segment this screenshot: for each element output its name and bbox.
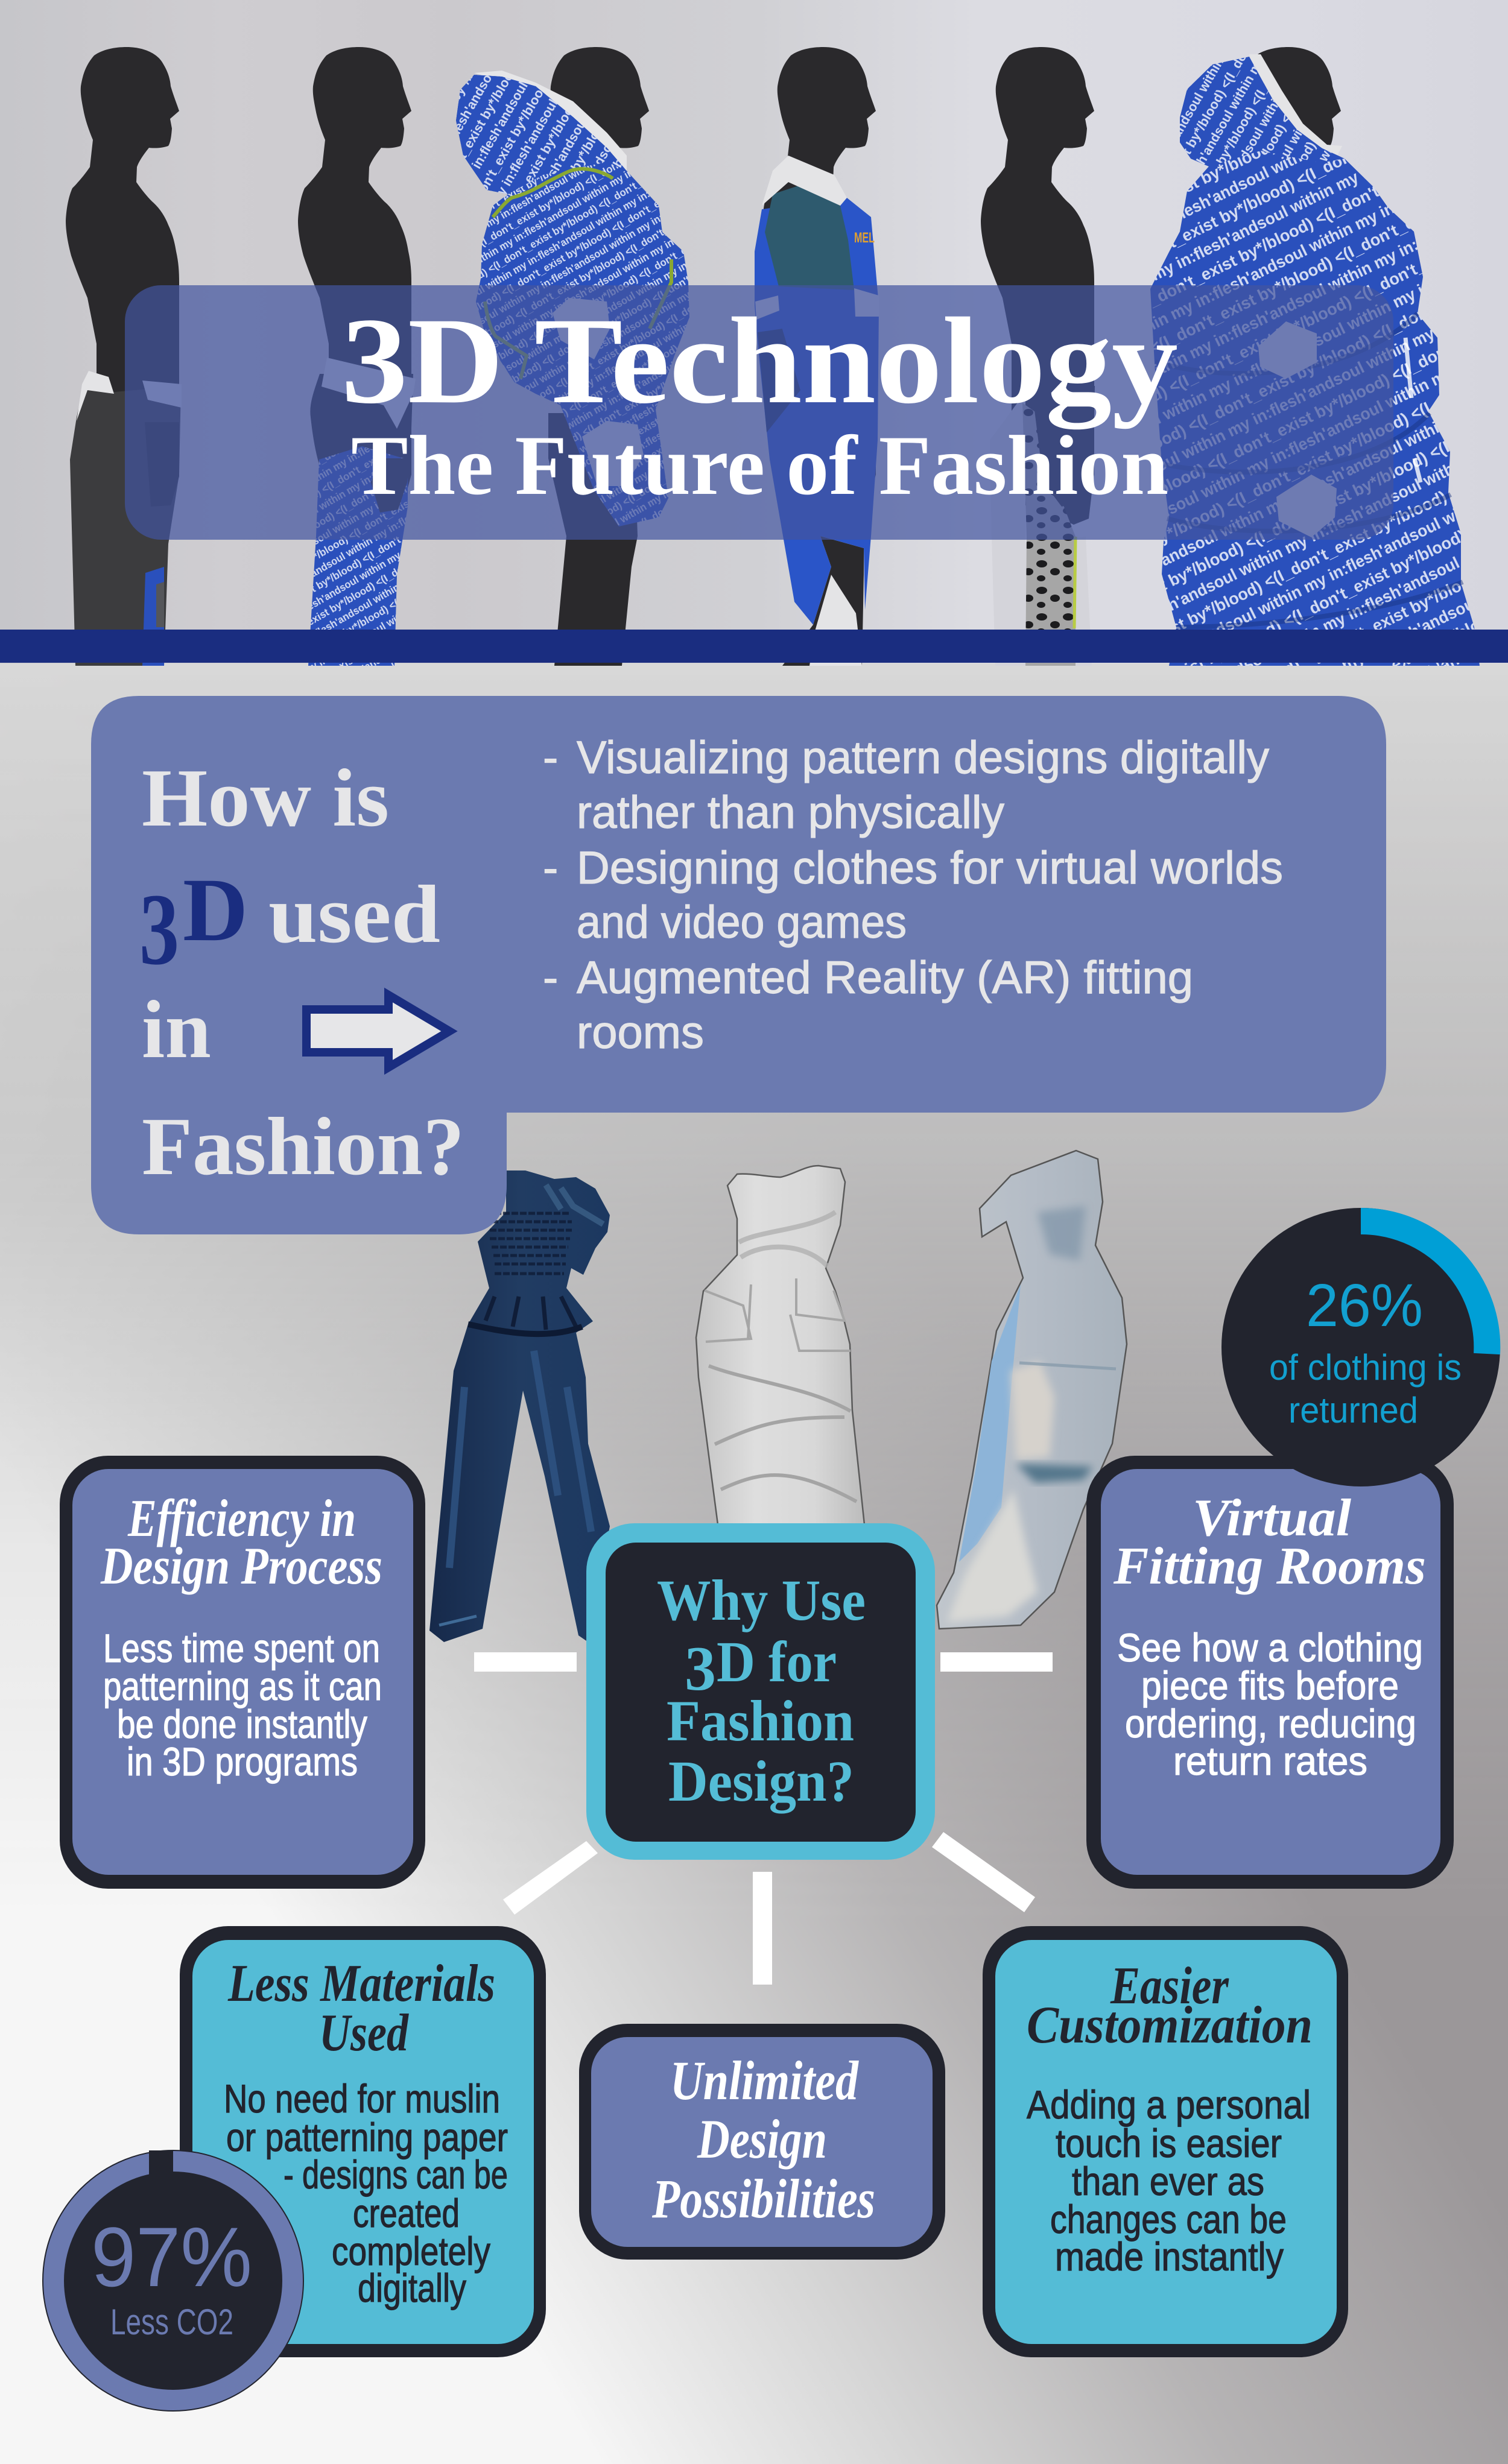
list: uses of 3D: Visualizing pattern designs digitally <box>577 732 1269 783</box>
heading: how is 3D used in fashion: D <box>183 860 248 960</box>
figure 3: hooded jacket <box>456 47 689 666</box>
card: efficiency in design process <box>60 1456 425 1889</box>
heading: how is 3D used in fashion <box>139 752 464 1192</box>
title line 1: 3D Technology <box>341 292 1178 429</box>
arrow <box>306 995 449 1067</box>
title line 2: The Future of Fashion <box>351 419 1168 513</box>
card heading <box>100 1489 382 1596</box>
card heading: Customization <box>1027 1996 1313 2055</box>
card heading: Used <box>319 2004 410 2062</box>
card heading: Design <box>697 2108 827 2170</box>
heading: how is 3D used in fashion: Fashion? <box>142 1101 464 1192</box>
card body: return rates <box>1173 1739 1367 1783</box>
stat: 26% of clothing returned <box>1221 1208 1500 1486</box>
garment: white dress <box>696 1166 864 1524</box>
stat text <box>91 2210 252 2342</box>
connector lines <box>474 1652 1053 1985</box>
list: uses of 3D: rooms <box>577 1007 704 1058</box>
central heading: Fashion <box>667 1688 854 1753</box>
stat text <box>1269 1272 1462 1430</box>
panel: how is 3D used in fashion <box>91 696 1386 1234</box>
heading: how is 3D used in fashion: used <box>268 868 440 960</box>
list: uses of 3D: Designing clothes for virtual worlds <box>577 842 1283 894</box>
list: uses of 3D: - <box>543 732 558 783</box>
card body: made instantly <box>1055 2234 1284 2279</box>
card body: - designs can be <box>284 2152 508 2197</box>
central heading <box>657 1568 866 1813</box>
card body <box>1117 1625 1423 1783</box>
card heading <box>651 2050 875 2229</box>
donut arc <box>1361 1221 1487 1354</box>
card body: digitally <box>358 2266 466 2310</box>
card body <box>224 2076 508 2310</box>
garment: sheer blue draped gown <box>937 1151 1127 1629</box>
list: uses of 3D: - <box>543 952 558 1003</box>
card body: changes can be <box>1050 2197 1287 2241</box>
card heading: Design Process <box>100 1537 382 1596</box>
stat text: 26% <box>1306 1272 1423 1339</box>
card heading: Virtual <box>1193 1489 1352 1547</box>
hero photo: mannequins <box>0 0 1508 666</box>
list: uses of 3D: and video games <box>577 897 907 948</box>
stat text: 97% <box>91 2210 252 2304</box>
stat text: Less CO2 <box>110 2302 233 2342</box>
central heading: D for <box>717 1629 837 1694</box>
card heading: Fitting Rooms <box>1113 1537 1426 1596</box>
central heading: Design? <box>668 1749 854 1813</box>
card body: in 3D programs <box>127 1739 358 1784</box>
central heading: Why Use <box>657 1568 866 1632</box>
donut notch <box>149 2150 173 2175</box>
list: uses of 3D: Augmented Reality (AR) fitting <box>577 952 1193 1003</box>
card heading: Easier <box>1110 1957 1229 2015</box>
figure 6: oversized puffer jacket <box>1150 47 1480 666</box>
navy band <box>0 630 1508 663</box>
list: uses of 3D: - <box>543 842 558 894</box>
figure 4: blue sports top <box>755 47 879 666</box>
card body: touch is easier <box>1056 2121 1282 2165</box>
heading: how is 3D used in fashion: in <box>142 984 211 1075</box>
stat: 97% less CO2 <box>43 2150 303 2411</box>
figure 2: mannequin with patterned sleeve <box>298 47 416 666</box>
heading: how is 3D used in fashion: 3 <box>139 873 179 986</box>
card body: created <box>353 2191 460 2235</box>
card: unlimited design possibilities <box>579 2024 945 2260</box>
card body: than ever as <box>1072 2159 1264 2203</box>
heading: how is 3D used in fashion: How is <box>142 752 389 844</box>
list: uses of 3D: rather than physically <box>577 787 1004 838</box>
card body <box>1027 2082 1311 2279</box>
central heading: 3 <box>685 1633 716 1704</box>
card body: No need for muslin <box>224 2076 500 2121</box>
card heading: Unlimited <box>670 2050 860 2111</box>
card body: See how a clothing <box>1117 1625 1423 1670</box>
card heading: Efficiency in <box>127 1489 356 1548</box>
garment: navy jumpsuit <box>429 1170 610 1642</box>
figure 5: leopard print trousers <box>981 47 1095 666</box>
card body: or patterning paper <box>226 2115 508 2159</box>
title banner <box>125 285 1393 540</box>
figure 4: blue sports top: MEL <box>854 230 875 246</box>
list: uses of 3D <box>543 732 1283 1058</box>
card heading <box>227 1954 495 2062</box>
card body <box>103 1626 382 1784</box>
card body: completely <box>332 2229 490 2273</box>
central node: why use 3D <box>586 1523 935 1860</box>
card body: piece fits before <box>1141 1663 1399 1708</box>
card heading <box>1027 1957 1313 2055</box>
figure 1: mannequin with dark trousers <box>66 47 182 666</box>
background <box>0 663 1508 2464</box>
card heading: Possibilities <box>651 2168 875 2229</box>
card body: patterning as it can <box>103 1664 382 1708</box>
stat text: returned <box>1288 1390 1418 1430</box>
card body: Adding a personal <box>1027 2082 1311 2127</box>
card body: be done instantly <box>117 1702 367 1746</box>
card heading: Less Materials <box>227 1954 495 2013</box>
card heading <box>1113 1489 1426 1596</box>
card: easier customization <box>983 1926 1348 2357</box>
stat text: of clothing is <box>1269 1347 1462 1388</box>
card: less materials used <box>180 1926 546 2357</box>
card body: ordering, reducing <box>1125 1701 1416 1746</box>
card body: Less time spent on <box>103 1626 380 1670</box>
card: virtual fitting rooms <box>1086 1456 1454 1889</box>
